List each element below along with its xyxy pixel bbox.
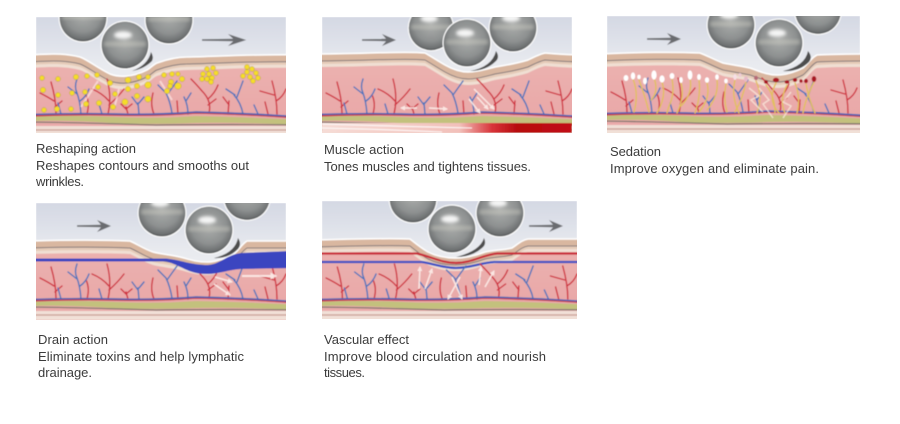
caption: muscle action: Muscle action [324, 142, 404, 157]
caption: reshaping action: Reshapes contours and smooths out [36, 158, 249, 173]
illustration: drain action [36, 203, 286, 320]
panel: vascular effect [322, 201, 577, 377]
caption: vascular effect: Vascular effect [324, 332, 409, 347]
panel: muscle action [322, 17, 572, 174]
artery and vein [317, 254, 582, 268]
caption: vascular effect [324, 332, 546, 380]
caption: reshaping action [35, 141, 249, 189]
caption: muscle action [324, 142, 531, 174]
lymph vessel [31, 251, 291, 274]
caption: sedation [610, 144, 819, 176]
panel: reshaping action [36, 17, 286, 186]
caption: sedation: Sedation [610, 144, 661, 159]
caption: muscle action: Tones muscles and tightens tissues. [324, 159, 531, 174]
caption: reshaping action: wrinkles. [35, 174, 84, 189]
caption: reshaping action: Reshaping action [36, 141, 136, 156]
caption: drain action: drainage. [38, 365, 92, 380]
caption: vascular effect: tissues. [324, 365, 365, 380]
caption: drain action: Drain action [38, 332, 108, 347]
illustration: reshaping action [36, 17, 286, 133]
illustration: muscle action [322, 17, 572, 133]
illustration: sedation [607, 16, 860, 133]
illustration: vascular effect [322, 201, 577, 319]
caption: drain action [38, 332, 244, 380]
caption: drain action: Eliminate toxins and help lymphatic [38, 349, 244, 364]
panel: sedation [607, 16, 860, 176]
caption: vascular effect: Improve blood circulation and nourish [324, 349, 546, 364]
caption: sedation: Improve oxygen and eliminate pain. [610, 161, 819, 176]
panel: drain action [36, 203, 286, 380]
